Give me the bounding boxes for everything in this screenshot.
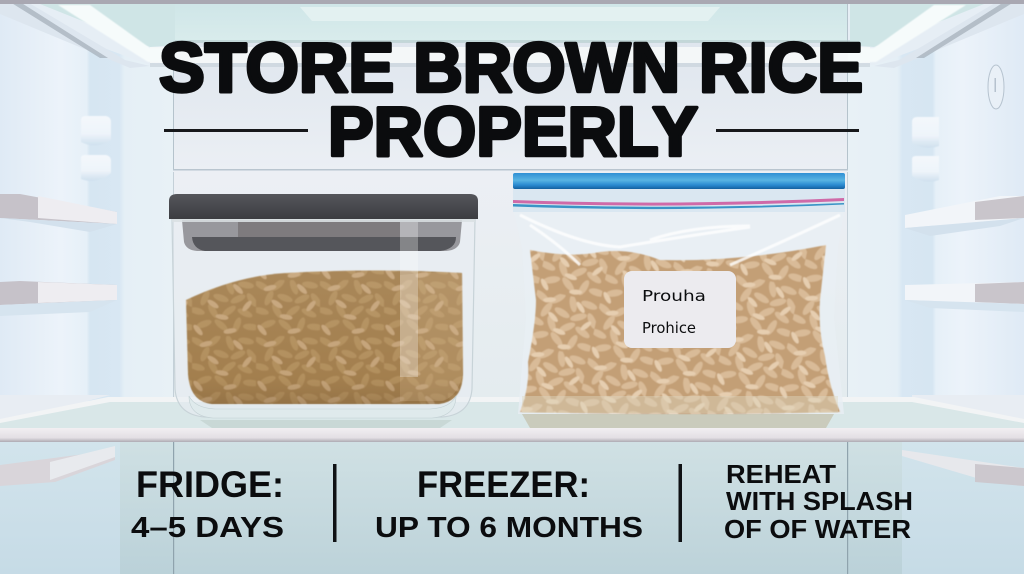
label text line 2: Prohice: [642, 319, 696, 337]
glass reflection on shelf: [200, 420, 452, 428]
lid inner seal: [182, 220, 462, 251]
icon: right knob lower: [912, 156, 939, 182]
title line 1: STORE BROWN RICE: [159, 28, 863, 106]
back wall middle section: [173, 170, 848, 400]
bag clear body: [514, 210, 844, 414]
tip: fridge: [131, 464, 284, 544]
glass base: [189, 396, 456, 418]
icon: left knob upper: [81, 116, 111, 146]
right side wall: [848, 10, 1024, 574]
bag plastic folds: [520, 215, 840, 265]
lid top: [169, 194, 478, 219]
right shelf lower: [902, 395, 1024, 486]
back wall lower section: [120, 440, 902, 574]
brown rice: [186, 270, 463, 404]
left side wall: [0, 10, 173, 574]
left shelf upper: [0, 194, 117, 232]
reheat line 1: REHEAT: [726, 459, 836, 489]
tip: reheat: [724, 459, 913, 544]
label text line 1: Prouha: [642, 287, 706, 305]
fridge heading: FRIDGE:: [136, 464, 284, 505]
zip teal line: [513, 203, 844, 209]
left shelf lower: [0, 395, 115, 486]
fridge duration: 4–5 DAYS: [131, 512, 284, 544]
bag shelf reflection: [522, 414, 834, 428]
right ceiling light strip: [848, 0, 1024, 68]
glass shelf: [0, 397, 1024, 430]
freezer duration: UP TO 6 MONTHS: [375, 512, 643, 544]
left side wall lower: [0, 440, 173, 574]
reheat line 2: WITH SPLASH: [726, 486, 913, 516]
lid inner seal dark: [192, 237, 456, 251]
zip band pale: [513, 188, 845, 212]
glass rim: [172, 219, 475, 222]
tip: freezer: [375, 464, 643, 544]
title rule right: [716, 129, 859, 132]
back wall upper panel: [173, 42, 848, 170]
shelf front edge: [0, 428, 1024, 442]
top frame: [0, 0, 1024, 4]
bag rice: [520, 245, 840, 414]
shelf glass surface: [0, 398, 1024, 430]
zip seal blue: [513, 173, 845, 189]
bag label: [624, 271, 736, 348]
right shelf upper: [905, 196, 1024, 236]
freezer heading: FREEZER:: [417, 464, 590, 505]
lid inner seal centre: [238, 222, 400, 238]
zip pink line: [513, 198, 844, 206]
icon: round sensor: [988, 65, 1004, 109]
left shelf middle: [0, 281, 117, 316]
reheat line 3: OF OF WATER: [724, 514, 911, 544]
zip bag of rice: [513, 173, 845, 428]
rice right side lighter: [400, 273, 463, 401]
bag bottom plastic band: [522, 396, 838, 413]
title rule left: [164, 129, 308, 132]
left ceiling light strip: [0, 0, 175, 68]
title line 2: PROPERLY: [328, 92, 698, 170]
glass highlight strip: [400, 222, 418, 377]
shelf rim back: [0, 397, 1024, 423]
title: [159, 28, 863, 170]
right side wall lower: [848, 440, 1024, 574]
divider two: [678, 464, 682, 542]
icon: right knob upper: [912, 117, 939, 148]
container glass body: [172, 219, 475, 417]
right shelf middle: [905, 282, 1024, 312]
back wall ceiling band: [173, 4, 848, 42]
rice shading: [186, 270, 463, 404]
icon: left knob lower: [81, 155, 111, 181]
right door bins and buttons: [902, 65, 1024, 486]
food container: glass with lid: [169, 194, 478, 428]
divider one: [333, 464, 336, 542]
left door bins and buttons: [0, 116, 117, 486]
